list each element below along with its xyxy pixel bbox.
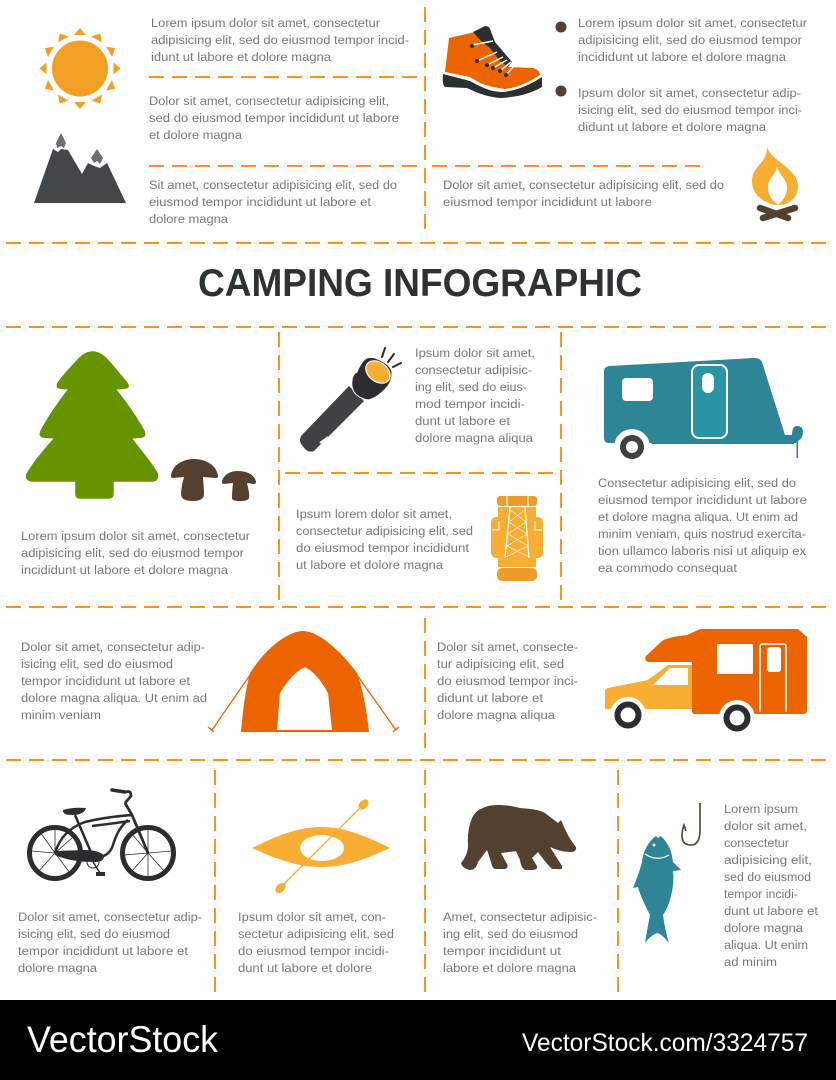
text: caravan block — [598, 476, 807, 575]
text: middle block: sed do eiusmod tempor incididunt ut labore — [149, 111, 399, 125]
text: fish block: dunt ut labore et — [724, 904, 819, 918]
icon: bear — [461, 805, 576, 870]
text: kayak block: do eiusmod tempor incidi- — [238, 944, 389, 958]
text: tent block: isicing elit, sed do eiusmod — [21, 657, 173, 671]
icon: hiking boot — [443, 26, 542, 98]
text: kayak block: Ipsum dolor sit amet, con- — [238, 910, 386, 924]
footer bar — [0, 1000, 836, 1080]
text: fish block: dolor sit amet, — [724, 819, 807, 833]
text: boot block 1: incididunt ut labore et dolore magna — [578, 50, 786, 64]
icon: backpack — [491, 496, 543, 581]
text: boot block 1 — [578, 16, 807, 64]
text: flashlight block: dunt ut labore et — [415, 414, 511, 428]
text: backpack block: consectetur adipisicing elit, sed — [296, 524, 473, 538]
text: campfire block: Dolor sit amet, consectetur adipisicing elit, sed do — [443, 178, 724, 192]
text: fish block: consectetur — [724, 836, 789, 850]
text: backpack block — [296, 507, 473, 572]
icon: fish and hook — [633, 803, 700, 943]
footer logo text: VectorStock — [27, 1019, 218, 1060]
text: flashlight block: consectetur adipisic- — [415, 363, 532, 377]
icon: campfire — [752, 146, 798, 218]
icon: mountains — [34, 133, 126, 203]
text: kayak block: sectetur adipisicing elit, sed — [238, 927, 394, 941]
icon: caravan — [580, 358, 803, 465]
text: bicycle block: tempor incididunt ut labore et — [18, 944, 189, 958]
text: kayak block — [238, 910, 394, 975]
text: boot block 2: Ipsum dolor sit amet, consectetur adip- — [578, 86, 801, 100]
text: middle block: Dolor sit amet, consectetur adipisicing elit, — [149, 94, 389, 108]
text: mountain block: Sit amet, consectetur adipisicing elit, sed do — [149, 178, 397, 192]
text: fish block: aliqua. Ut enim — [724, 938, 808, 952]
bullet 1 — [556, 22, 566, 32]
text: mountain block — [149, 178, 397, 226]
text: middle block — [149, 94, 399, 142]
text: tree block — [21, 529, 250, 577]
icon: pine tree — [27, 352, 157, 498]
text: kayak block: dunt ut labore et dolore — [238, 961, 372, 975]
text: sun block: Lorem ipsum dolor sit amet, consectetur — [151, 16, 380, 30]
text: tree block: adipisicing elit, sed do eiusmod tempor — [21, 546, 244, 560]
text: flashlight block: ing elit, sed do eius- — [415, 380, 527, 394]
icon: kayak — [252, 797, 390, 895]
text: flashlight block: dolore magna aliqua — [415, 431, 533, 445]
icon: mushrooms — [171, 459, 256, 501]
text: boot block 2: isicing elit, sed do eiusmod tempor inci- — [578, 103, 802, 117]
text: truck camper block: tur adipisicing elit, sed — [437, 657, 564, 671]
text: sun block — [151, 16, 409, 64]
text: caravan block: tion ullamco laboris nisi ut aliquip ex — [598, 544, 807, 558]
text: bear block: Amet, consectetur adipisic- — [443, 910, 597, 924]
icon: tent — [208, 631, 399, 732]
text: bicycle block: isicing elit, sed do eiusmod — [18, 927, 170, 941]
text: bear block: tempor incididunt ut — [443, 944, 562, 958]
text: fish block: Lorem ipsum — [724, 802, 798, 816]
text: backpack block: Ipsum lorem dolor sit amet, — [296, 507, 452, 521]
text: fish block: ad minim — [724, 955, 777, 969]
text: bicycle block: Dolor sit amet, consectetur adip- — [18, 910, 202, 924]
text: backpack block: do eiusmod tempor incididunt — [296, 541, 470, 555]
text: sun block: adipisicing elit, sed do eiusmod tempor incid- — [151, 33, 409, 47]
text: mountain block: eiusmod tempor incididunt ut labore et — [149, 195, 372, 209]
text: tent block: Dolor sit amet, consectetur adip- — [21, 640, 205, 654]
text: truck camper block: Dolor sit amet, consecte- — [437, 640, 578, 654]
icon: flashlight — [300, 348, 401, 452]
icon: sun — [40, 28, 120, 109]
text: fish block: sed do eiusmod — [724, 870, 811, 884]
text: tree block: incididunt ut labore et dolore magna — [21, 563, 228, 577]
text: fish block: dolore magna — [724, 921, 803, 935]
text: bear block: labore et dolore magna — [443, 961, 576, 975]
text: bear block: ing elit, sed do eiusmod — [443, 927, 578, 941]
text: middle block: et dolore magna — [149, 128, 242, 142]
text: boot block 2 — [578, 86, 802, 134]
text: fish block: adipisicing elit, — [724, 853, 812, 867]
text: tent block: minim veniam — [21, 708, 101, 722]
text: sun block: idunt ut labore et dolore magna — [151, 50, 331, 64]
text: flashlight block: Ipsum dolor sit amet, — [415, 346, 535, 360]
text: truck camper block: dolore magna aliqua — [437, 708, 555, 722]
text: boot block 1: adipisicing elit, sed do eiusmod tempor — [578, 33, 802, 47]
text: flashlight block — [415, 346, 535, 445]
text: campfire block: eiusmod tempor incididunt ut labore — [443, 195, 652, 209]
text: caravan block: eiusmod tempor incididunt ut labore — [598, 493, 807, 507]
footer url: VectorStock.com/3324757 — [522, 1029, 808, 1057]
text: tree block: Lorem ipsum dolor sit amet, consectetur — [21, 529, 250, 543]
text: campfire block — [443, 178, 724, 209]
text: boot block 1: Lorem ipsum dolor sit amet, consectetur — [578, 16, 807, 30]
text: truck camper block — [437, 640, 578, 722]
text: caravan block: Consectetur adipisicing elit, sed do — [598, 476, 796, 490]
text: bicycle block — [18, 910, 202, 975]
text: tent block: tempor incididunt ut labore et — [21, 674, 191, 688]
bullet 2 — [556, 86, 566, 96]
icon: truck camper — [600, 629, 810, 736]
text: boot block 2: didunt ut labore et dolore magna — [578, 120, 766, 134]
text: truck camper block: do eiusmod tempor inci- — [437, 674, 578, 688]
text: fish block: tempor incidi- — [724, 887, 798, 901]
text: backpack block: ut labore et dolore magna — [296, 558, 443, 572]
text: mountain block: dolore magna — [149, 212, 228, 226]
icon: bicycle — [30, 790, 174, 878]
text: caravan block: minim veniam, quis nostrud exercita- — [598, 527, 806, 541]
text: fish block — [724, 802, 819, 969]
text: truck camper block: didunt ut labore et — [437, 691, 544, 705]
text: caravan block: ea commodo consequat — [598, 561, 738, 575]
text: bear block — [443, 910, 597, 975]
title: CAMPING INFOGRAPHIC — [198, 262, 642, 305]
text: tent block: dolore magna aliqua. Ut enim ad — [21, 691, 207, 705]
text: tent block — [21, 640, 207, 722]
text: caravan block: et dolore magna aliqua. Ut enim ad — [598, 510, 798, 524]
text: flashlight block: mod tempor incidi- — [415, 397, 525, 411]
text: bicycle block: dolore magna — [18, 961, 97, 975]
